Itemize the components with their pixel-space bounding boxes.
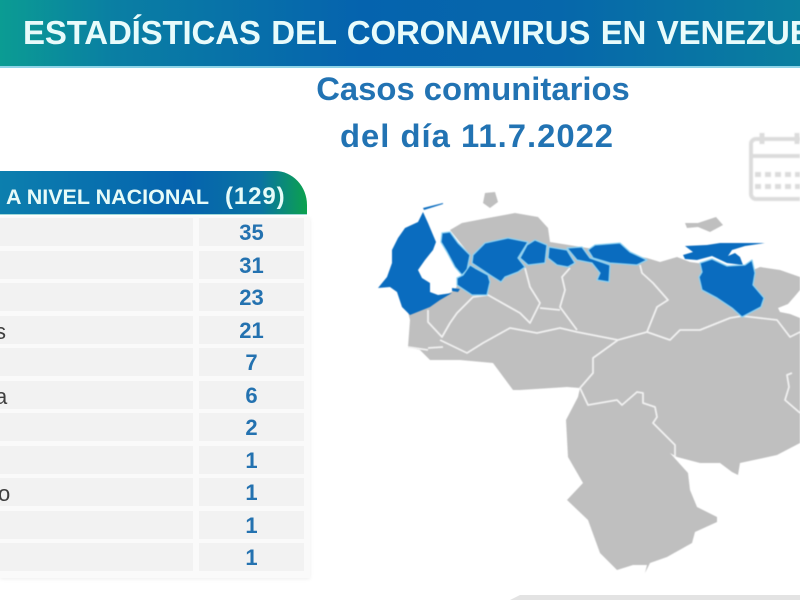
bottom footer bar [510, 595, 800, 600]
state borders [408, 265, 800, 457]
row 9: 1 [245, 480, 258, 505]
table heading: A NIVEL NACIONAL [6, 185, 209, 209]
row 7: 2 [245, 415, 258, 440]
row 8: 1 [245, 448, 258, 473]
table heading [0, 171, 307, 215]
subtitle: del día 11.7.2022 [340, 117, 614, 154]
subtitle [316, 70, 630, 154]
header banner [0, 0, 800, 68]
blue states [378, 203, 765, 317]
row 6: 6 [245, 383, 258, 408]
subtitle: Casos comunitarios [316, 70, 630, 107]
row 11: 1 [245, 545, 258, 570]
row 5: 7 [245, 350, 258, 375]
gray states [408, 192, 800, 573]
delta cut-out [778, 290, 800, 318]
table heading: (129) [225, 183, 286, 210]
row 6 [0, 383, 258, 409]
row 2: 31 [239, 253, 264, 278]
row 3: 23 [239, 285, 264, 310]
Zulia [378, 212, 452, 315]
row 9 [0, 480, 258, 506]
row 10: 1 [245, 513, 258, 538]
row 4 [0, 318, 264, 344]
icon: calendar [748, 132, 800, 202]
row 1: 35 [239, 220, 264, 245]
table panel [0, 217, 310, 578]
row 4: 21 [239, 318, 264, 343]
